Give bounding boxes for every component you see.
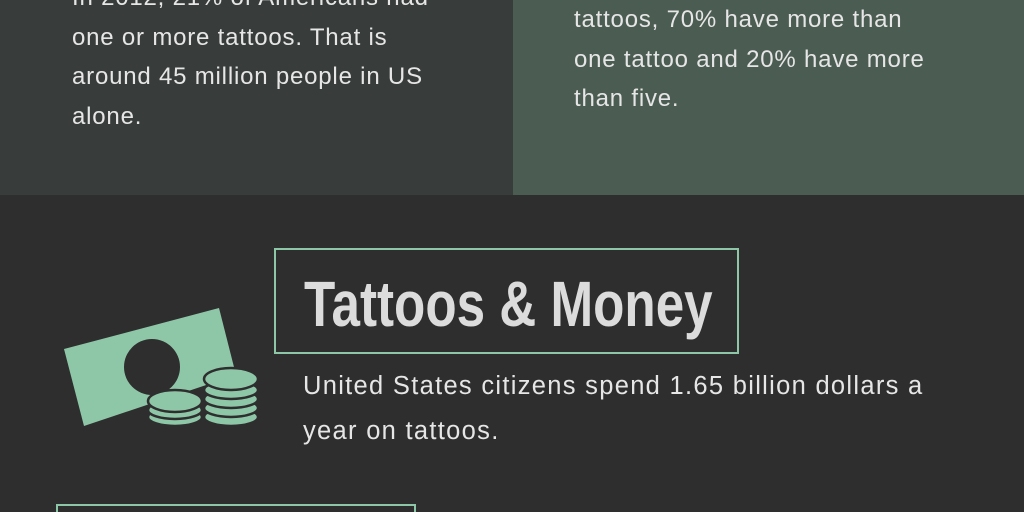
text: americans with tattoos: one or more tattoos. That is xyxy=(72,24,387,50)
text: multiple tattoos: tattoos, 70% have more than xyxy=(574,6,902,33)
text: spending xyxy=(303,372,924,445)
heading: Tattoos & Money xyxy=(274,248,739,354)
text: spending: year on tattoos. xyxy=(303,417,500,445)
text: americans with tattoos: alone. xyxy=(72,102,142,130)
panel: left stat xyxy=(0,0,513,195)
text: multiple tattoos: than five. xyxy=(574,85,679,112)
panel: right stat xyxy=(513,0,1024,195)
text: americans with tattoos: around 45 million people in US xyxy=(72,63,423,90)
box: next section heading frame xyxy=(56,504,416,512)
text: spending: United States citizens spend 1.65 billion dollars a xyxy=(303,372,924,400)
heading: Tattoos & Money: Tattoos & Money xyxy=(304,268,713,340)
icon: money bill and coins xyxy=(64,308,257,426)
text: multiple tattoos xyxy=(574,6,925,112)
text: multiple tattoos: one tattoo and 20% have more xyxy=(574,46,925,72)
text: americans with tattoos xyxy=(72,0,429,130)
